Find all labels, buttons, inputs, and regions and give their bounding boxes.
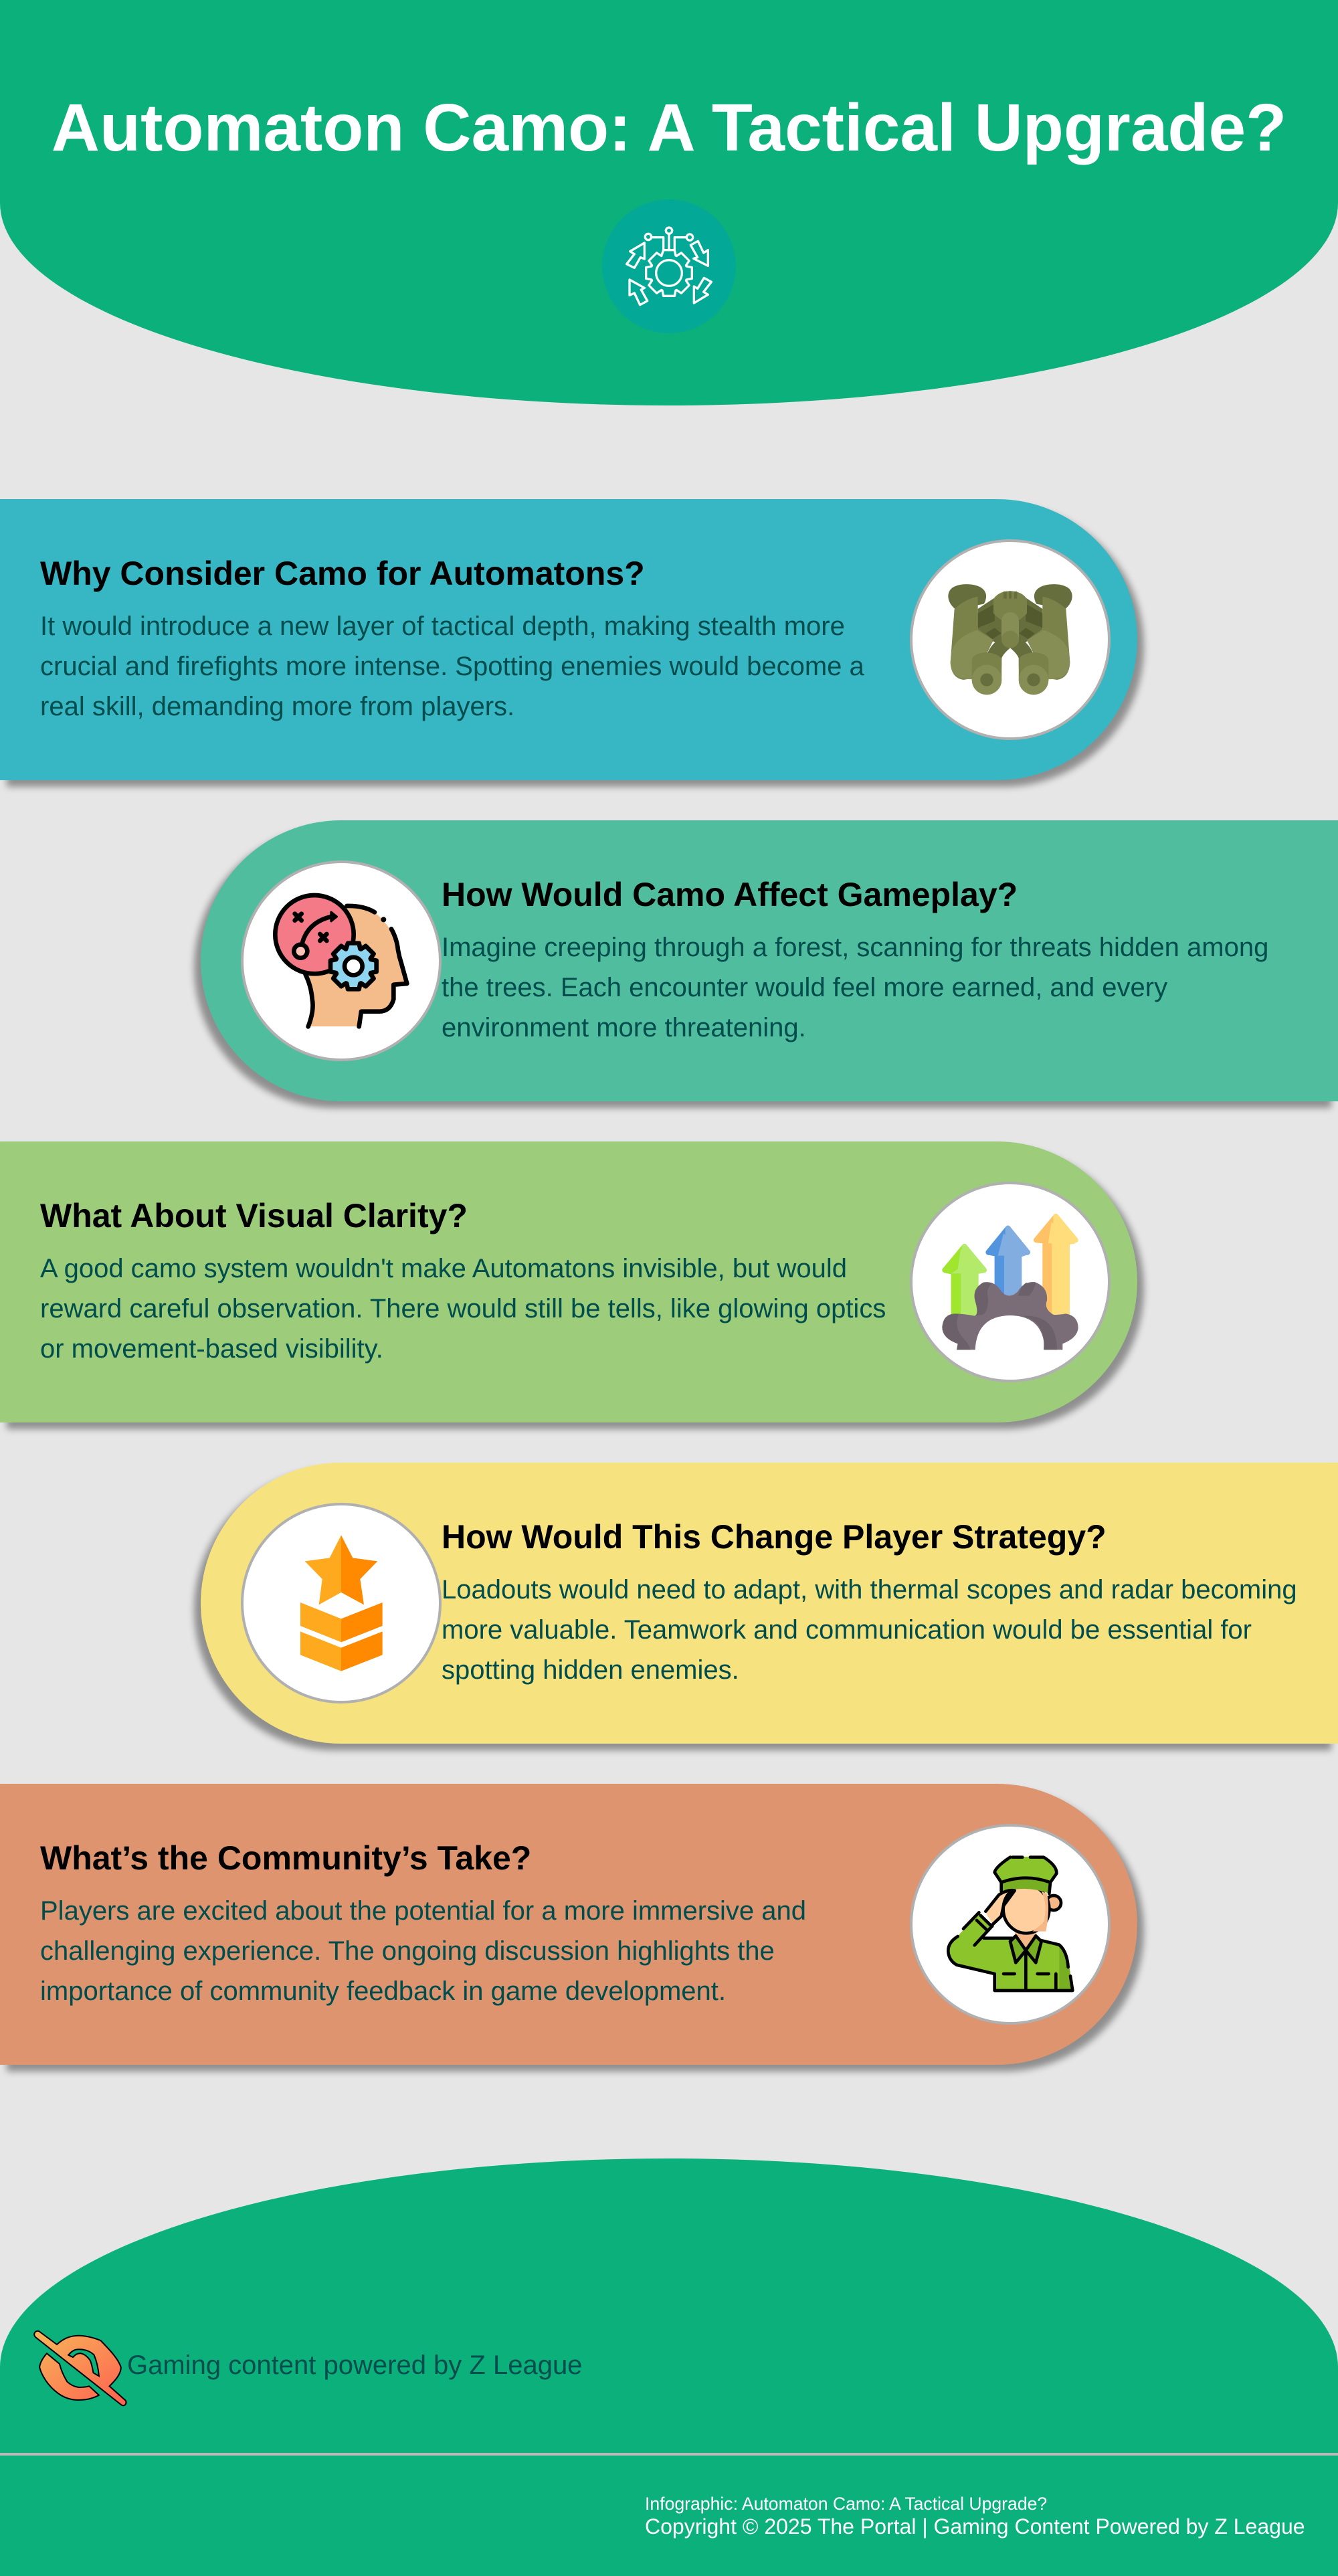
divider <box>0 2453 1338 2456</box>
body text <box>442 933 1268 1042</box>
body text: or movement-based visibility. <box>40 1334 383 1364</box>
panel: player strategy <box>201 1463 1338 1744</box>
body text: Imagine creeping through a forest, scanning for threats hidden among <box>442 933 1268 962</box>
body text <box>40 1896 806 2006</box>
body text: real skill, demanding more from players. <box>40 692 514 721</box>
body text <box>40 612 864 721</box>
heading: How Would Camo Affect Gameplay? <box>442 876 1018 913</box>
body text: crucial and firefights more intense. Spotting enemies would become a <box>40 652 864 681</box>
title: Automaton Camo: A Tactical Upgrade? <box>52 90 1286 165</box>
heading: What’s the Community’s Take? <box>40 1839 531 1877</box>
icon: gear with circuit and arrows <box>602 199 736 333</box>
footer note: Gaming content powered by Z League <box>127 2351 582 2380</box>
body text: A good camo system wouldn't make Automatons invisible, but would <box>40 1254 847 1283</box>
infographic caption: Infographic: Automaton Camo: A Tactical Upgrade? <box>645 2494 1047 2514</box>
icon: head with strategy and gear <box>241 860 442 1061</box>
body text <box>40 1254 886 1364</box>
body text: It would introduce a new layer of tactical depth, making stealth more <box>40 612 845 641</box>
panel: gameplay <box>201 820 1338 1101</box>
heading: What About Visual Clarity? <box>40 1197 468 1234</box>
icon: binoculars <box>910 539 1111 740</box>
header banner <box>0 0 1338 405</box>
icon: arrows rising from gear <box>910 1182 1111 1382</box>
body text: more valuable. Teamwork and communication would be essential for <box>442 1615 1252 1645</box>
body text: the trees. Each encounter would feel more earned, and every <box>442 973 1167 1002</box>
body text: challenging experience. The ongoing discussion highlights the <box>40 1936 775 1966</box>
copyright block <box>645 2494 1305 2539</box>
icon: saluting soldier <box>910 1824 1111 2025</box>
panel: visual clarity <box>0 1141 1137 1422</box>
panel: community take <box>0 1784 1137 2065</box>
icon: star and chevrons <box>241 1503 442 1704</box>
body text: reward careful observation. There would still be tells, like glowing optics <box>40 1294 886 1323</box>
panel: why consider camo <box>0 499 1137 780</box>
copyright: Copyright © 2025 The Portal | Gaming Content Powered by Z League <box>645 2514 1305 2539</box>
icon: eye crossed out <box>33 2330 127 2406</box>
heading: How Would This Change Player Strategy? <box>442 1518 1107 1556</box>
body text: Loadouts would need to adapt, with thermal scopes and radar becoming <box>442 1575 1297 1604</box>
body text: spotting hidden enemies. <box>442 1655 739 1685</box>
body text <box>442 1575 1297 1685</box>
footer banner <box>0 2158 1338 2576</box>
body text: environment more threatening. <box>442 1013 806 1042</box>
heading: Why Consider Camo for Automatons? <box>40 555 645 592</box>
body text: importance of community feedback in game development. <box>40 1976 726 2006</box>
body text: Players are excited about the potential for a more immersive and <box>40 1896 806 1926</box>
